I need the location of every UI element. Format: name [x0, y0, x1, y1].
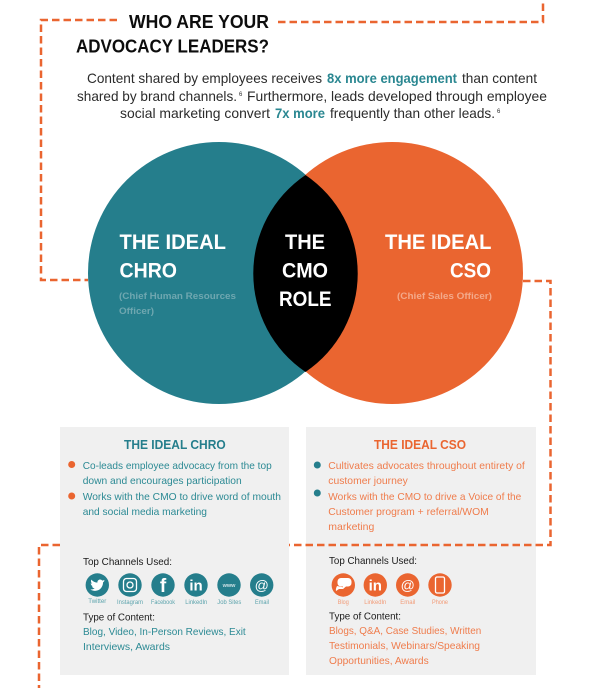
intro text: 8x more engagement [327, 70, 457, 86]
bullet list: marketing [328, 521, 374, 533]
content type text: Opportunities, Awards [329, 655, 429, 667]
label: the CMO role: THE [285, 230, 325, 254]
intro text: Content shared by employees receives [87, 70, 322, 86]
bullet list: Cultivates advocates throughout entirety of [328, 460, 525, 472]
bullet list: customer journey [328, 475, 409, 487]
label: the ideal CHRO: Officer) [119, 306, 154, 317]
bullet list [314, 460, 525, 533]
title [76, 11, 270, 56]
label: the ideal CHRO: (Chief Human Resources [119, 291, 236, 302]
label: the ideal CSO: (Chief Sales Officer) [397, 291, 492, 302]
channels heading: Top Channels Used: [83, 556, 172, 568]
title: WHO ARE YOUR [129, 11, 270, 32]
label: the ideal CHRO: CHRO [120, 258, 177, 282]
bullet list: down and encourages participation [83, 475, 242, 487]
icon: instagram: Instagram [117, 600, 143, 606]
icon: twitter [86, 573, 109, 605]
icon: phone: Phone [432, 600, 449, 606]
icon: facebook [151, 573, 176, 606]
icon: linkedin [364, 573, 387, 606]
icon: linkedin: LinkedIn [364, 600, 386, 606]
content type text: Blog, Video, In-Person Reviews, Exit [83, 626, 246, 638]
icon: linkedin: LinkedIn [185, 600, 207, 606]
icon: facebook: Facebook [151, 600, 176, 606]
intro text [77, 70, 547, 121]
content type heading: Type of Content: [329, 610, 401, 622]
label: the ideal CHRO: THE IDEAL [120, 230, 226, 254]
icon: facebook: f [160, 576, 167, 597]
intro text: shared by brand channels. [77, 88, 237, 104]
content type text: Blogs, Q&A, Case Studies, Written [329, 625, 481, 637]
label: the CMO role: CMO [282, 258, 328, 282]
intro text: frequently than other leads. [330, 105, 495, 121]
icon: job sites: Job Sites [217, 600, 241, 606]
intro text: 6 [239, 92, 243, 98]
intro text: social marketing convert [120, 105, 270, 121]
bullet list: Works with the CMO to drive word of mouth [83, 491, 281, 503]
bullet list: and social media marketing [83, 506, 207, 518]
channels heading: Top Channels Used: [329, 555, 417, 567]
label: the ideal CSO: CSO [450, 258, 491, 282]
circle: CHRO [88, 142, 350, 404]
icon: linkedin: in [189, 578, 203, 594]
label: the CMO role: ROLE [279, 287, 332, 311]
label: the ideal CHRO [119, 230, 236, 317]
content type text [329, 625, 481, 667]
venn diagram [88, 142, 523, 404]
bullet list [68, 460, 281, 518]
label: the CMO role [279, 230, 332, 311]
title: ADVOCACY LEADERS? [76, 36, 269, 56]
icon: email: @ [401, 577, 415, 593]
icon: linkedin [184, 573, 208, 606]
circle: CSO [261, 142, 523, 404]
icon: blog: Blog [338, 600, 349, 606]
icon: blog [332, 573, 355, 606]
icon: email: @ [255, 577, 269, 593]
intro text: 7x more [275, 105, 325, 121]
content type text: Testimonials, Webinars/Speaking [329, 640, 480, 652]
bullet list: Works with the CMO to drive a Voice of the [328, 491, 521, 503]
connector: top dashed line [41, 0, 543, 280]
intro text: 6 [497, 109, 501, 115]
bullet list: Co-leads employee advocacy from the top [83, 460, 272, 472]
icon: phone [428, 573, 452, 606]
icon: instagram [117, 573, 143, 606]
label: the ideal CSO [385, 230, 492, 302]
content type heading: Type of Content: [83, 612, 155, 624]
heading: THE IDEAL CHRO [124, 437, 226, 452]
panel: ideal CSO [306, 427, 536, 675]
lens: CMO overlap [253, 175, 358, 372]
bullet list: Customer program + referral/WOM [328, 506, 489, 518]
connector: lower dashed line [39, 281, 550, 688]
icon: email: Email [400, 600, 415, 606]
icon: linkedin: in [369, 578, 382, 594]
label: the ideal CSO: THE IDEAL [385, 230, 492, 254]
intro text: than content [462, 70, 537, 86]
intro text: Furthermore, leads developed through employee [247, 88, 547, 104]
icon: job sites [217, 573, 241, 606]
heading: THE IDEAL CSO [374, 437, 466, 452]
content type text [83, 626, 246, 653]
icon: email: Email [255, 600, 269, 606]
icon: email [396, 573, 419, 606]
icon: email [250, 573, 273, 606]
content type text: Interviews, Awards [83, 641, 170, 653]
panel: ideal CHRO [60, 427, 289, 675]
icon: twitter: Twitter [88, 599, 106, 605]
icon: job sites: www [222, 583, 236, 589]
